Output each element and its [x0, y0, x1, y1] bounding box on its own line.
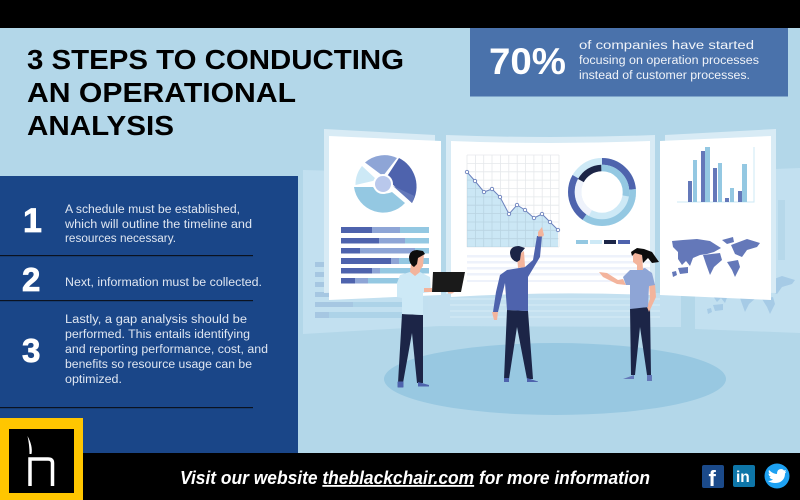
- panel: middle screen: [446, 135, 655, 297]
- step 2: 2: [22, 261, 40, 298]
- title: ANALYSIS: [27, 110, 174, 141]
- figure: man with laptop: [397, 250, 465, 387]
- panel: steps: [0, 176, 298, 453]
- step 3: Lastly, a gap analysis should be: [65, 314, 247, 326]
- step 1: A schedule must be established,: [65, 204, 240, 216]
- bottom bar: [0, 453, 800, 500]
- line chart: [465, 155, 560, 247]
- step 3: 3: [22, 332, 40, 369]
- stat text: of companies have started: [579, 40, 754, 52]
- figure: woman: [599, 248, 659, 381]
- stat number: 70%: [489, 41, 566, 82]
- panel: right screen: [660, 129, 776, 300]
- world map: [672, 237, 760, 277]
- icon: linkedin: in: [736, 469, 750, 486]
- stat text: instead of customer processes.: [579, 70, 750, 82]
- title: [27, 44, 404, 141]
- footer text: Visit our website theblackchair.com for more information: [180, 468, 650, 488]
- icon: twitter: [764, 464, 790, 488]
- step 3: optimized.: [65, 374, 122, 386]
- step 3: benefits so resource usage can be: [65, 359, 252, 371]
- step 1: 1: [23, 202, 42, 240]
- title: 3 STEPS TO CONDUCTING: [27, 44, 404, 75]
- icon: facebook: [702, 465, 724, 491]
- step 1: [23, 202, 252, 245]
- text stripes: [467, 255, 650, 282]
- stat text: [579, 40, 759, 82]
- step 1: which will outline the timeline and: [64, 219, 252, 231]
- stat text: focusing on operation processes: [579, 55, 759, 67]
- pie chart: [354, 155, 417, 213]
- donut legend: [576, 240, 630, 244]
- column chart: [677, 147, 754, 202]
- donut chart: [572, 162, 632, 222]
- panel: left screen: [324, 129, 441, 300]
- logo: [0, 418, 83, 500]
- step 3: [22, 314, 268, 386]
- illustration background: [303, 168, 800, 334]
- step 2: Next, information must be collected.: [65, 277, 262, 289]
- bar list: [341, 227, 429, 284]
- icon: facebook: f: [708, 466, 716, 491]
- step 2: [22, 261, 262, 298]
- step 3: performed. This entails identifying: [65, 329, 250, 341]
- stat callout: [470, 28, 788, 96]
- step 1: resources necessary.: [65, 233, 176, 245]
- floor ellipse: [384, 343, 726, 415]
- title: AN OPERATIONAL: [27, 77, 296, 108]
- top bar: [0, 0, 800, 28]
- figure: man pointing: [492, 227, 544, 382]
- step 3: and reporting performance, cost, and: [65, 344, 268, 356]
- icon: linkedin: [733, 465, 755, 487]
